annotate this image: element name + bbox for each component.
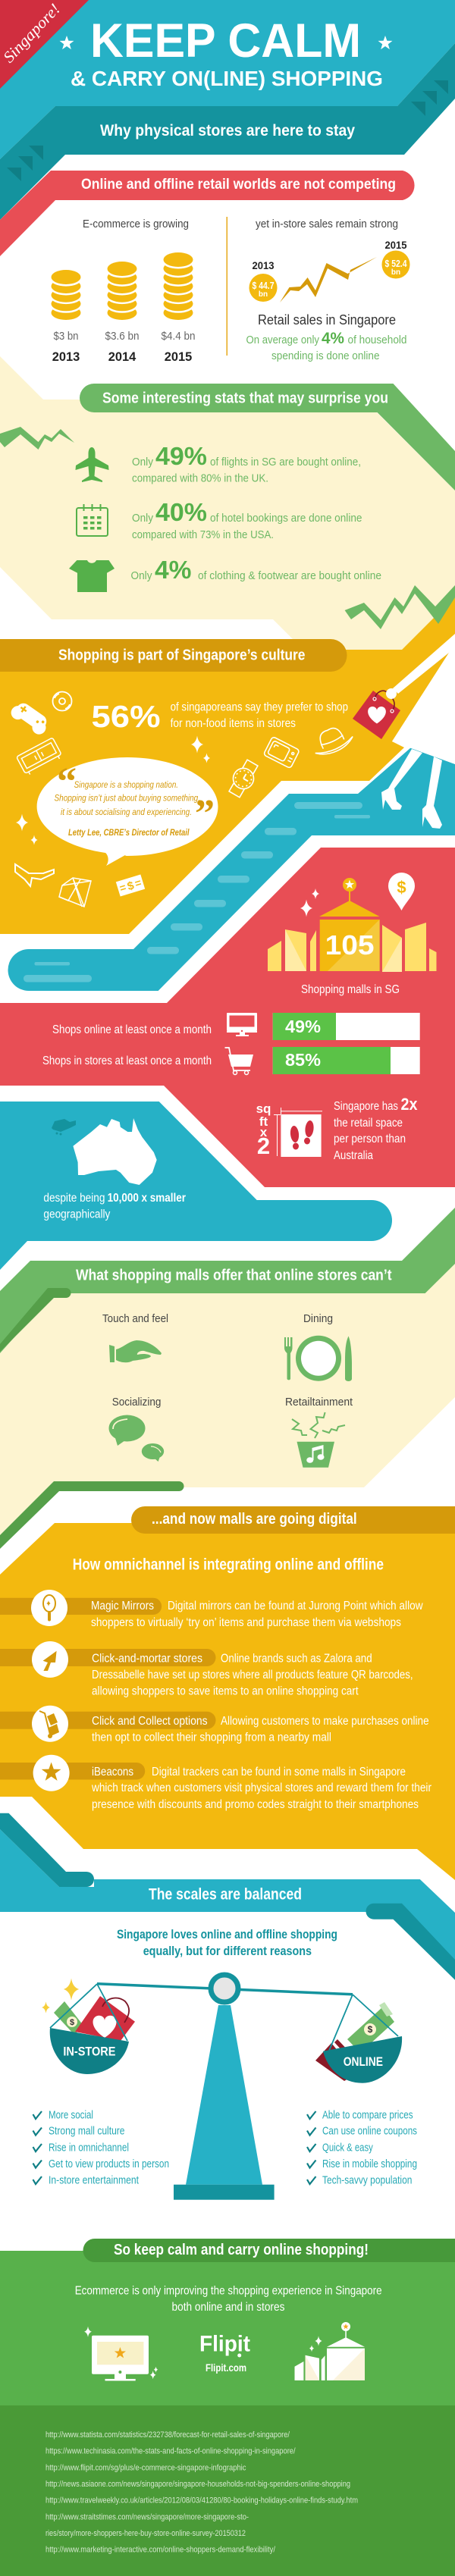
icon: plane [76,447,109,482]
bar: 49% [273,1013,420,1040]
icon: white mall [294,2322,365,2380]
source list: https://www.techinasia.com/the-stats-and-facts-of-online-shopping-in-singapore/ [46,2447,296,2456]
quote: Shopping isn’t just about buying something, [55,793,200,804]
conclusion text [75,2285,382,2314]
omnichannel item: magic mirrors: shoppers to virtually ‘try on’ items and purchase them via webshops [91,1616,401,1629]
panel: green conclusion [0,2251,455,2405]
geography text: geographically [43,1208,111,1221]
coin labels: $3.6 bn [105,330,140,343]
omnichannel item: click and collect: Allowing customers to make purchases online [221,1715,429,1728]
retail space text: Australia [334,1149,373,1162]
shopper figure [353,634,455,829]
retail space text: 2x [400,1095,418,1114]
zigzag left [0,427,74,450]
retail sales line chart: bn [391,268,400,277]
stat: hotels: 40% [155,498,207,526]
icon: mall building [268,878,437,972]
offer: touch and feel [102,1312,168,1362]
list: in-store reasons: In-store entertainment [49,2174,140,2187]
household spending note: spending is done online [271,349,379,362]
panel: cream mall offers [0,1264,455,1535]
stat: hotels: Only [132,512,153,525]
title stars [59,36,393,49]
omnichannel item: click and collect: then opt to collect their shopping from a nearby mall [92,1731,331,1744]
offer: dining: Dining [303,1312,333,1325]
icon: watch [225,757,262,800]
right pan items [315,2002,394,2081]
offer: retailtainment [285,1396,353,1468]
icon: cupboard [17,738,63,776]
list: online reasons: Tech-savvy population [322,2174,412,2187]
coin stack 2013 [50,270,82,320]
icon: australia map [73,1118,157,1185]
sq ft x 2 label [256,1102,271,1159]
dark green stripes [0,1288,71,1352]
heading: conclusion: So keep calm and carry online shopping! [114,2242,369,2258]
retail space text: the retail space [334,1117,403,1130]
source list: http://www.straitstimes.com/news/singapore/more-singapore-sto- [46,2512,249,2521]
retail sales line chart: 2013 [252,259,275,271]
geography text: 10,000 x smaller [108,1192,186,1205]
household spending note: 4% [322,330,344,347]
icon: footprints on floor plan [274,1108,322,1157]
stat: hotels [132,498,362,541]
list: online reasons [307,2108,417,2187]
stat: clothing: of clothing & footwear are bought online [198,569,381,582]
source list: http://www.travelweekly.co.uk/articles/2012/08/03/41280/80-booking-holidays-online-finds-study.htm [46,2496,358,2505]
list: in-store reasons: More social [49,2108,93,2121]
left pan items [42,1979,135,2041]
coin stack 2015 [162,252,194,320]
offer: retailtainment: Retailtainment [285,1396,353,1409]
intro text: equally, but for different reasons [143,1944,312,1958]
retail sales line chart: $ 44.7 [252,280,275,291]
icon: cd [53,691,71,711]
icon: high-heel shoe [15,864,54,886]
stat: clothing [130,556,381,584]
intro text [117,1927,337,1958]
subheading: omnichannel: How omnichannel is integrating online and offline [73,1556,384,1574]
logo: Flipit [199,2332,250,2374]
conclusion text: Ecommerce is only improving the shopping experience in Singapore [75,2285,382,2297]
coin labels: 2013 [52,349,80,364]
icon: singapore map [52,1119,76,1136]
sq ft x 2 label: ft [259,1114,268,1129]
header band [0,0,455,220]
source list: http://www.statista.com/statistics/232738/forecast-for-retail-sales-of-singapore/ [46,2430,290,2440]
retail space text: per person than [334,1133,406,1145]
stat: flights: compared with 80% in the UK. [132,472,268,485]
source list: http://www.flipit.com/sg/plus/e-commerce-singapore-infographic [46,2463,246,2472]
sq ft x 2 label: sq [256,1102,271,1116]
coin labels: $4.4 bn [161,330,196,343]
bar: 85% [273,1047,420,1074]
icon: t-shirt [69,560,115,592]
chart: balance scale [42,1975,402,2200]
list: in-store reasons: Strong mall culture [49,2125,124,2138]
corner tag: Singapore!: Singapore! [0,0,64,66]
source list: http://www.marketing-interactive.com/online-shoppers-demand-flexibility/ [46,2546,276,2555]
list: online reasons: Can use online coupons [322,2125,417,2138]
omnichannel item: magic mirrors: Digital mirrors can be found at Jurong Point which allow [168,1600,423,1612]
panel: teal walkway [8,747,455,991]
heading: mall offers: What shopping malls offer that online stores can’t [76,1268,392,1284]
stat: flights: of flights in SG are bought online, [210,456,361,469]
list: online reasons: Rise in mobile shopping [322,2158,417,2170]
icon: calendar [77,504,108,536]
retail space text [334,1095,418,1162]
quote: “ [57,760,77,804]
stat: clothing: 4% [155,556,191,584]
geography text [43,1192,186,1221]
stat: flights: Only [132,456,153,469]
walkway stripes [24,802,370,982]
icon: location pin [388,873,415,910]
retail sales line chart: $ 52.4 [385,259,407,269]
icon: location pin: $ [397,878,406,897]
coin stack 2014 [106,262,138,320]
omnichannel item: ibeacons: iBeacons [92,1766,133,1778]
list: in-store reasons [33,2108,169,2187]
omnichannel item: click and collect [0,1706,429,1744]
retail sales line chart: bn [259,290,268,299]
heading band: going digital [131,1506,455,1534]
geography text: despite being [43,1192,105,1205]
conclusion text: both online and in stores [171,2301,284,2314]
stat: hotels: of hotel bookings are done online [210,512,362,525]
panel: teal geography [0,1102,392,1270]
omnichannel item: ibeacons [0,1755,431,1811]
household spending note [246,330,406,362]
household spending note: On average only [246,334,319,346]
stat text: for non-food items in stores [171,717,296,730]
icon: hat [309,722,356,760]
icon: tv [263,736,300,769]
coin labels: 2015 [165,349,192,364]
retail sales line chart [249,239,410,302]
icon: cart [224,1048,253,1075]
green heading band [80,384,455,490]
source list [46,2430,358,2555]
list: online reasons: Quick & easy [322,2141,373,2154]
offer: touch and feel: Touch and feel [102,1312,168,1325]
quote: Singapore is a shopping nation. [74,779,178,790]
heading: scales: The scales are balanced [149,1886,302,1903]
icon: game controller [8,699,52,737]
source list: http://news.asiaone.com/news/singapore/singapore-households-not-big-spenders-online-shopping [46,2480,350,2489]
left pan items: $ [70,2018,74,2027]
offer: dining [284,1312,352,1381]
label: shops online: Shops online at least once a month [52,1023,212,1036]
panel: red malls field [0,848,455,1187]
icon: banknote [116,874,145,897]
title: KEEP CALM [90,14,361,67]
heading: interesting stats: Some interesting stats that may surprise you [102,390,388,406]
heading: not competing: Online and offline retail worlds are not competing [81,176,396,193]
offer: socializing: Socializing [112,1396,161,1409]
panel: sources [0,2405,455,2576]
chart: balance scale: IN-STORE [63,2044,115,2059]
heading band: conclusion [83,2239,455,2262]
icon: banknote: $ [126,879,136,893]
teal heading band: scales [0,1813,455,1980]
list: in-store reasons: Rise in omnichannel [49,2141,129,2154]
heading band: mall offers [0,1208,455,1353]
quote: Letty Lee, CBRE’s Director of Retail [68,827,190,838]
retail sales line chart: 2015 [385,239,407,251]
stat: flights: 49% [155,442,207,470]
omnichannel item: ibeacons: presence with discounts and promo codes straight to their smartphones [92,1798,419,1811]
sq ft x 2 label: 2 [257,1133,270,1159]
omnichannel item: ibeacons: Digital trackers can be found in some malls in Singapore [152,1766,406,1778]
section heading: why physical stores: Why physical stores are here to stay [100,122,355,139]
zigzag right [345,585,455,629]
source list: ries/story/more-shoppers-here-buy-store-online-survey-20150312 [46,2529,246,2538]
quote: ” [195,792,215,835]
e-commerce column heading: E-commerce is growing [83,218,189,230]
panel: yellow digital field [0,1523,455,1880]
stat text: of singaporeans say they prefer to shop [171,700,348,714]
red heading band [0,171,415,256]
logo: Flipit: Flipit [199,2332,250,2356]
list: online reasons: Able to compare prices [322,2108,413,2121]
stat: hotels: compared with 73% in the USA. [132,528,274,541]
chart: balance scale: ONLINE [344,2054,383,2069]
omnichannel item: click and collect: Click and Collect options [92,1715,208,1728]
label: shops in stores: Shops in stores at least once a month [42,1055,212,1067]
heading: culture: Shopping is part of Singapore’s culture [58,647,305,664]
quote: it is about socialising and experiencing. [61,807,192,817]
bar: 49%: 49% [285,1017,321,1036]
stat text [171,700,348,730]
right pan items: $ [368,2024,373,2035]
stat: flights [132,442,361,485]
coin labels: 2014 [108,349,136,364]
omnichannel item: magic mirrors [0,1590,423,1629]
stat: 105 malls: 105 [325,929,375,961]
icon: diamond [59,878,91,907]
intro text: Singapore loves online and offline shopping [117,1927,337,1941]
icon: monitor [227,1013,257,1036]
background: cream stats panel [0,356,455,650]
subtitle: & CARRY ON(LINE) SHOPPING [71,67,383,90]
omnichannel item: click-and-mortar [0,1641,413,1698]
coin labels [52,330,196,364]
quote [55,760,215,838]
stat: 56%: 56% [91,699,161,734]
icon: sparkles [16,735,210,845]
list: in-store reasons: Get to view products in person [49,2158,169,2170]
coin labels: $3 bn [53,330,79,343]
sq ft x 2 label: x [260,1125,268,1139]
offer: socializing [109,1396,164,1462]
logo: Flipit: Flipit.com [206,2361,246,2374]
omnichannel item: click-and-mortar: Click-and-mortar stores [92,1653,202,1665]
chart caption: Retail sales in Singapore [258,312,396,327]
panel: culture yellow field [0,597,455,934]
mall caption: Shopping malls in SG [301,983,400,996]
heading band: culture [0,639,347,672]
bar: 85%: 85% [285,1050,321,1070]
heading: going digital: ...and now malls are going digital [152,1511,357,1528]
omnichannel item: click-and-mortar: Online brands such as Zalora and [221,1653,372,1665]
in-store column heading: yet in-store sales remain strong [256,218,398,230]
omnichannel item: click-and-mortar: allowing shoppers to save items to an online shopping cart [92,1684,359,1698]
speech bubble [37,757,218,866]
stat: clothing: Only [130,569,152,582]
icon: monitor with star [84,2327,158,2380]
household spending note: of household [347,334,406,346]
retail space text: Singapore has [334,1100,398,1113]
omnichannel item: magic mirrors: Magic Mirrors [91,1600,154,1612]
